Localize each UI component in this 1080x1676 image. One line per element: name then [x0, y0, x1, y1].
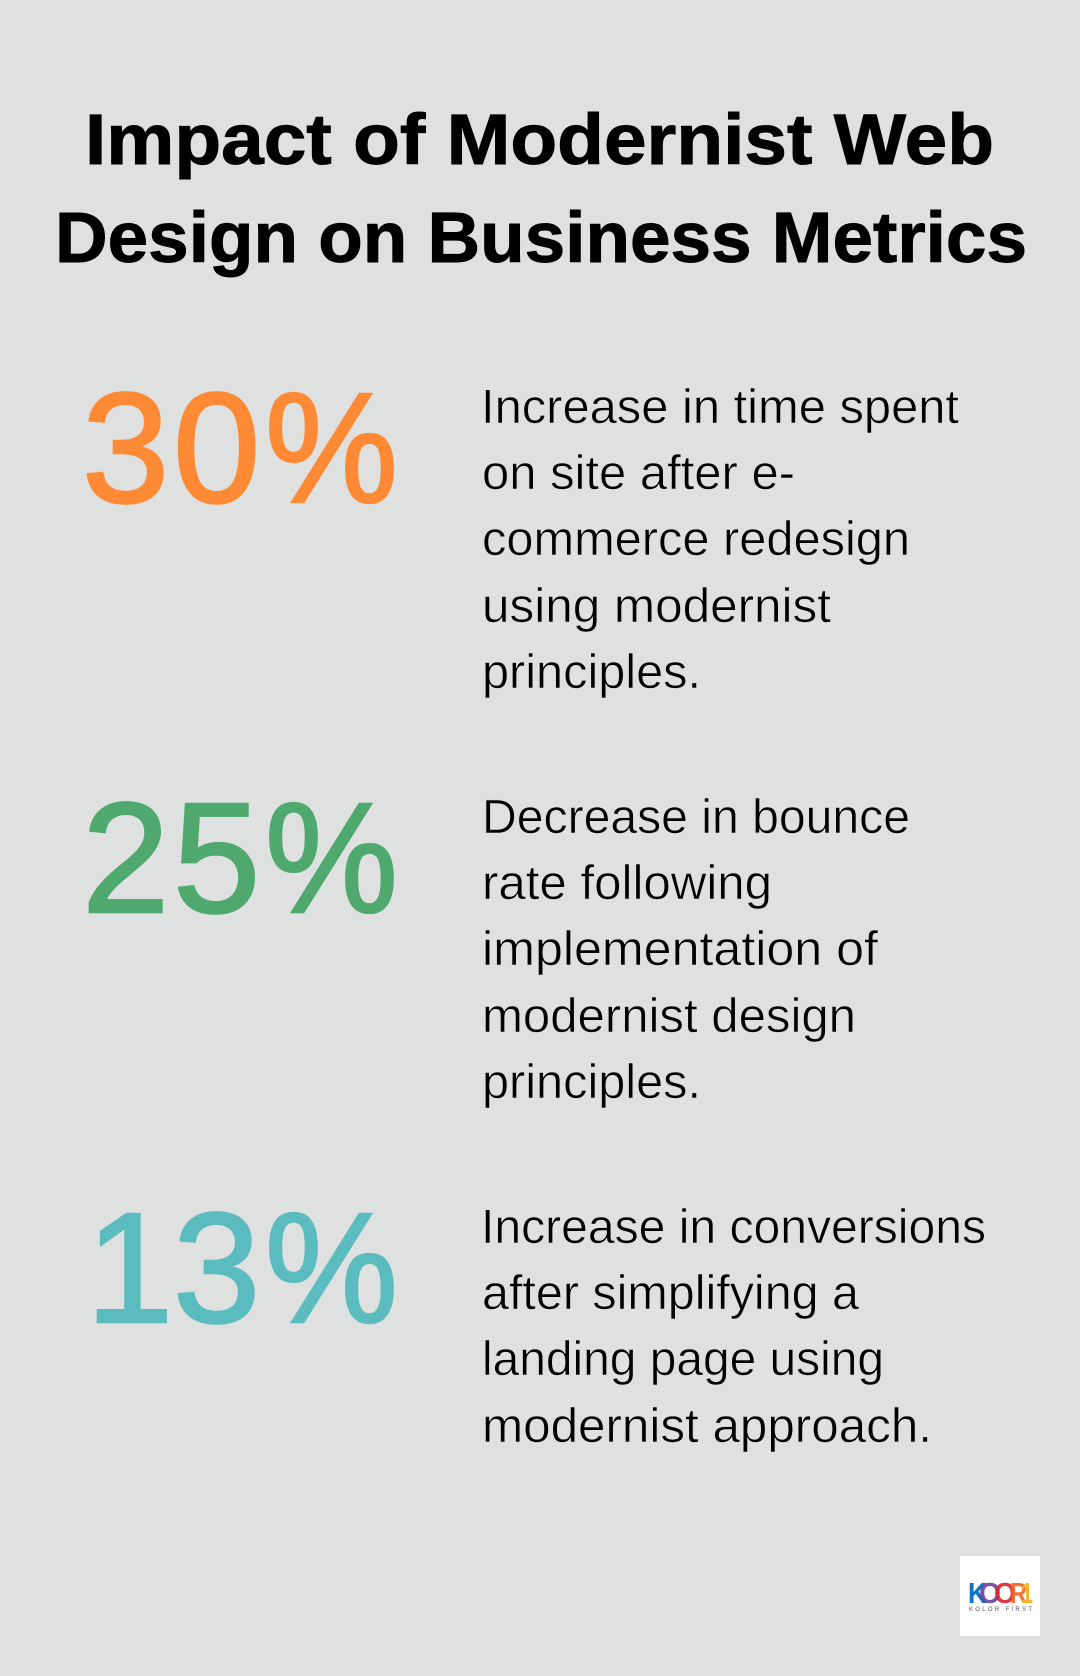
stat value: 13%: 13 — [86, 1181, 260, 1356]
logo: Koor1: O — [994, 1578, 1016, 1610]
stat description: bounce rate — [482, 791, 910, 1109]
stat description: bounce rate: principles. — [482, 1056, 701, 1109]
stat description: conversions: after simplifying a — [482, 1267, 859, 1320]
stat description: conversions: modernist approach. — [482, 1400, 932, 1453]
logo: Koor1 — [960, 1556, 1040, 1636]
stat description: time on site: principles. — [482, 646, 701, 699]
stat description: time on site: commerce redesign — [482, 513, 910, 566]
stat description: bounce rate: modernist design — [482, 990, 856, 1043]
stat panel: 13% — [86, 1181, 986, 1453]
stat description: bounce rate: Decrease in bounce — [482, 791, 910, 844]
logo: Koor1: 1 — [1021, 1578, 1033, 1610]
stat value: 25%: % — [265, 771, 398, 946]
stat value: 13% — [86, 1181, 398, 1356]
stat value: 25% — [82, 771, 398, 946]
stat value: 30% — [82, 361, 398, 536]
stat description: bounce rate: rate following — [482, 857, 772, 910]
stat panel: 25% — [82, 771, 910, 1109]
logo: Koor1: O — [979, 1578, 1001, 1610]
stat value: 25%: 25 — [82, 771, 260, 946]
title — [55, 101, 1027, 278]
stat value: 13%: % — [265, 1181, 398, 1356]
stat description: time on site: Increase in time spent — [481, 381, 959, 434]
stat description: conversions: landing page using — [482, 1333, 884, 1386]
stat description: time on site — [481, 381, 959, 699]
stat description: bounce rate: implementation of — [482, 923, 879, 976]
stat value: 30%: 30 — [82, 361, 260, 536]
title: Impact of Modernist Web — [85, 101, 994, 180]
logo: Koor1: R — [1010, 1578, 1027, 1610]
stat description: time on site: on site after e- — [482, 447, 795, 500]
stat description: conversions — [481, 1201, 986, 1453]
stat description: conversions: Increase in conversions — [481, 1201, 986, 1254]
stat value: 30%: % — [265, 361, 398, 536]
stat panel: 30% — [82, 361, 959, 699]
title: Design on Business Metrics — [55, 199, 1027, 278]
stat description: time on site: using modernist — [482, 580, 831, 633]
logo: Koor1: KOLOR FIRST — [969, 1607, 1032, 1613]
logo: Koor1: K — [968, 1578, 987, 1610]
